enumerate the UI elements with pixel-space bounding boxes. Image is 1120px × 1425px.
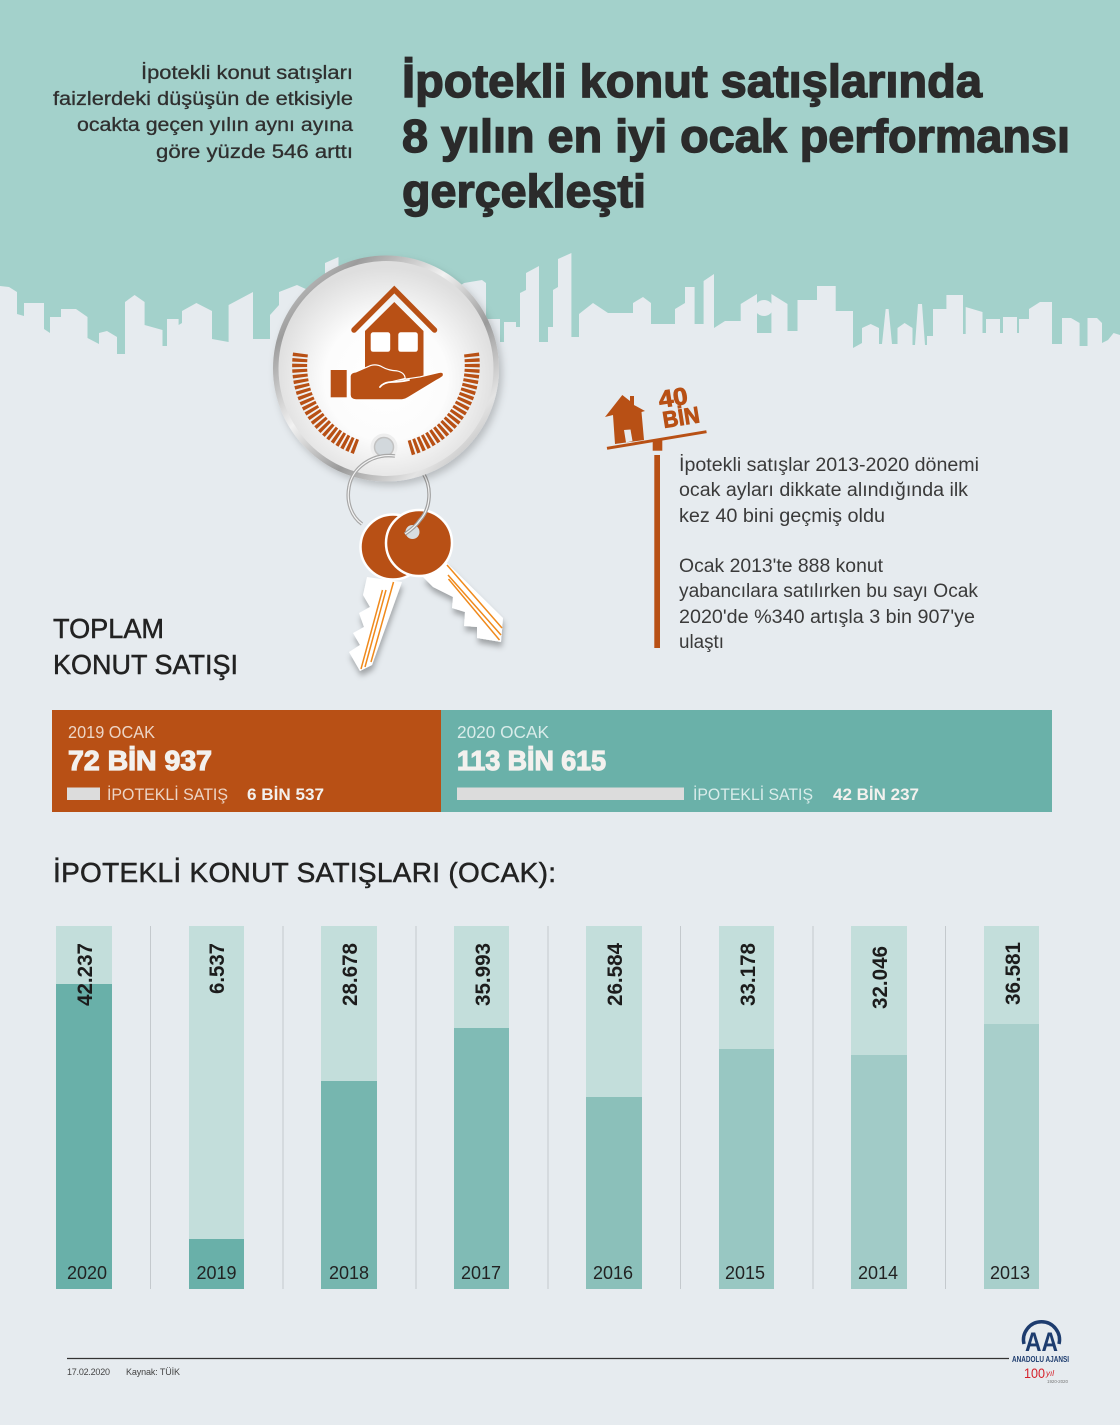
bar 2018: 28.678 bbox=[339, 943, 362, 1006]
footer: 17.02.2020 bbox=[67, 1367, 110, 1377]
bar 2016: 2016 bbox=[593, 1263, 633, 1283]
bar 2020: 42.237 bbox=[74, 943, 97, 1006]
logo: Anadolu Ajansi: 100 bbox=[1024, 1365, 1045, 1381]
bar 2018: 2018 bbox=[329, 1263, 369, 1283]
panel: 2019 january: 2019 OCAK bbox=[68, 722, 155, 742]
bar 2013: 2013 bbox=[990, 1263, 1030, 1283]
panel: 2020 january bbox=[441, 710, 1052, 812]
text block: foreign and mortgage sales: ocak ayları dikkate alındığında ilk bbox=[679, 480, 969, 501]
logo: Anadolu Ajansi: AA bbox=[1025, 1327, 1058, 1357]
bar 2017: 2017 bbox=[461, 1263, 501, 1283]
tick arcs bbox=[300, 354, 472, 448]
standfirst text: ocakta geçen yılın aynı ayına bbox=[77, 114, 353, 136]
panel: 2020 january: 42 BİN 237 bbox=[833, 785, 919, 804]
bar 2017: 35.993 bbox=[472, 943, 495, 1006]
panel: 2019 january: İPOTEKLİ SATIŞ bbox=[107, 785, 228, 804]
title: 8 yılın en iyi ocak performansı bbox=[402, 110, 1070, 162]
text block: foreign and mortgage sales: yabancılara satılırken bu sayı Ocak bbox=[679, 581, 978, 602]
title: İpotekli konut satışlarında bbox=[402, 55, 982, 107]
bar 2013: 36.581 bbox=[1002, 942, 1025, 1005]
bar 2015: 2015 bbox=[725, 1263, 765, 1283]
heading: total sales: KONUT SATIŞI bbox=[53, 649, 238, 680]
bar 2015: 33.178 bbox=[737, 943, 760, 1006]
bar 2018 bbox=[321, 926, 377, 1289]
bar 2016 bbox=[586, 926, 642, 1289]
bar 2015 bbox=[719, 926, 774, 1289]
icon: house on scale with 40 bin: BİN bbox=[661, 401, 701, 433]
footer bbox=[67, 1358, 1009, 1377]
tag hole bbox=[370, 434, 398, 460]
standfirst text: faizlerdeki düşüşün de etkisiyle bbox=[53, 88, 353, 110]
bar 2019 bbox=[189, 926, 244, 1289]
standfirst text: İpotekli konut satışları bbox=[141, 61, 353, 84]
text block: foreign and mortgage sales: 2020'de %340 artışla 3 bin 907'ye bbox=[679, 607, 975, 628]
heading: total sales bbox=[53, 613, 238, 680]
heading: total sales: TOPLAM bbox=[53, 613, 164, 644]
key ring back part bbox=[405, 473, 429, 534]
bar chart bbox=[56, 926, 1039, 1289]
text block: foreign and mortgage sales: kez 40 bini geçmiş oldu bbox=[679, 506, 885, 527]
bar 2019: 2019 bbox=[196, 1263, 237, 1283]
panel: 2019 january: 72 BİN 937 bbox=[68, 745, 212, 776]
bar 2014 bbox=[851, 926, 907, 1289]
bar 2013 bbox=[984, 926, 1039, 1289]
text block: foreign and mortgage sales: ulaştı bbox=[679, 632, 724, 653]
bar 2020: 2020 bbox=[67, 1263, 107, 1283]
panel: 2020 january: 2020 OCAK bbox=[457, 722, 549, 742]
icon: keys and keychain bbox=[273, 256, 503, 671]
panel: 2019 january bbox=[52, 710, 441, 812]
title: gerçekleşti bbox=[402, 165, 646, 217]
bar 2014: 2014 bbox=[858, 1263, 898, 1283]
right key bbox=[386, 510, 503, 642]
bar 2020 bbox=[56, 926, 112, 1289]
icon: house in hand bbox=[331, 290, 443, 399]
logo: Anadolu Ajansi bbox=[1012, 1322, 1069, 1384]
key tag disc bbox=[273, 256, 499, 482]
heading: mortgage sales january: İPOTEKLİ KONUT SATIŞLARI (OCAK): bbox=[53, 857, 556, 888]
standfirst text: göre yüzde 546 arttı bbox=[156, 141, 353, 163]
logo: Anadolu Ajansi: 1920-2020 bbox=[1047, 1379, 1068, 1384]
icon: house on scale with 40 bin: 40 bbox=[657, 383, 690, 414]
text block: foreign and mortgage sales: Ocak 2013'te 888 konut bbox=[679, 556, 884, 577]
title bbox=[402, 55, 1070, 217]
logo: Anadolu Ajansi: yıl bbox=[1045, 1369, 1054, 1378]
logo: Anadolu Ajansi: ANADOLU AJANSI bbox=[1012, 1354, 1069, 1364]
icon: house on scale with 40 bin bbox=[605, 383, 706, 648]
bar 2017 bbox=[454, 926, 509, 1289]
bar 2016: 26.584 bbox=[604, 943, 627, 1006]
text block: foreign and mortgage sales: İpotekli satışlar 2013-2020 dönemi bbox=[679, 455, 979, 476]
text block: foreign and mortgage sales bbox=[679, 455, 979, 653]
left key bbox=[349, 514, 426, 671]
key ring front part bbox=[348, 456, 395, 524]
bar 2019: 6.537 bbox=[206, 943, 229, 994]
panel: 2020 january: 113 BİN 615 bbox=[457, 745, 606, 776]
footer: Kaynak: TÜİK bbox=[126, 1367, 180, 1377]
panel: 2020 january: İPOTEKLİ SATIŞ bbox=[693, 785, 813, 804]
bar 2014: 32.046 bbox=[869, 946, 892, 1009]
panel: 2019 january: 6 BİN 537 bbox=[247, 785, 324, 804]
standfirst text bbox=[53, 61, 353, 163]
